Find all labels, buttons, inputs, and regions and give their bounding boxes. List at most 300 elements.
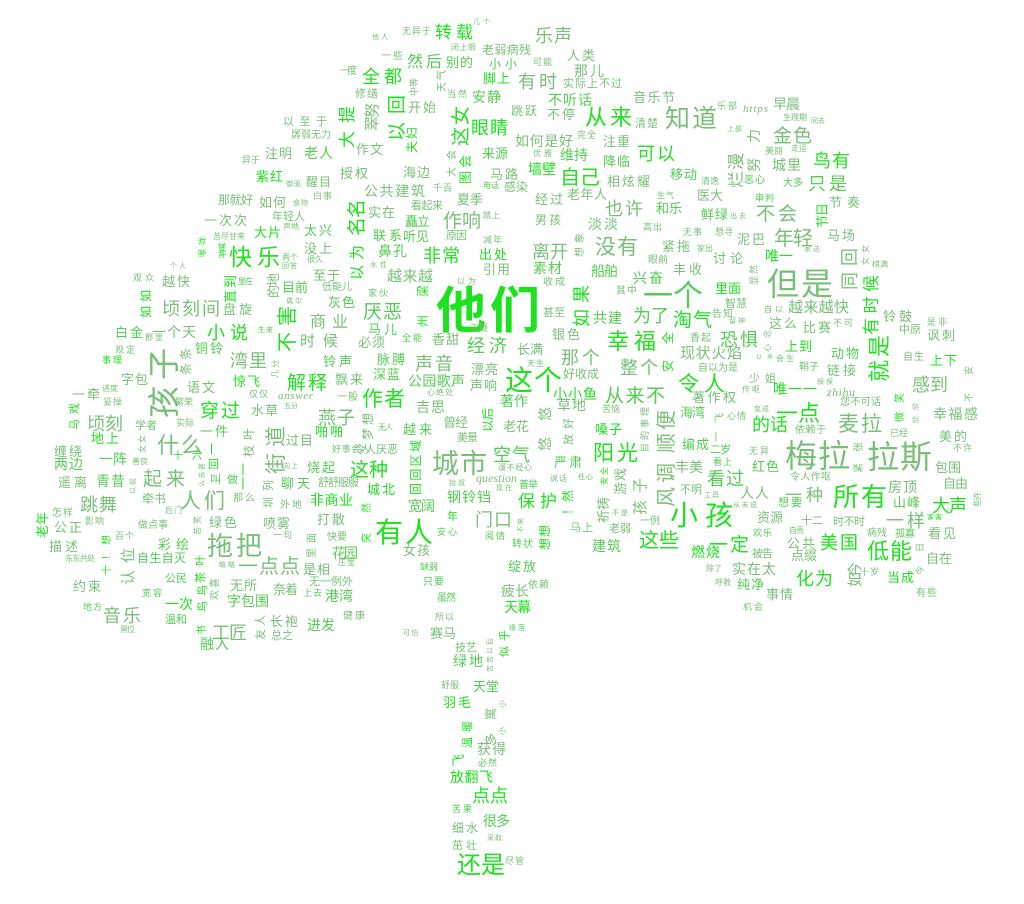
- canopy: lower left: 健康: [343, 609, 365, 622]
- canopy: centre: 收成: [543, 275, 565, 288]
- canopy: upper right: 烂漫: [727, 153, 746, 188]
- canopy: centre: 出处: [479, 247, 507, 262]
- canopy: upper right: 显然: [748, 265, 759, 285]
- canopy: centre: 天生: [527, 358, 544, 368]
- canopy: lower left: 牵书: [142, 492, 166, 506]
- canopy: centre: [354, 199, 758, 554]
- word: 令人: 令人: [678, 373, 725, 396]
- canopy: lower left: 鸟鸟: [195, 585, 209, 612]
- canopy: centre: 任心: [578, 472, 593, 481]
- canopy: centre: 如果: [572, 285, 592, 327]
- trunk words: 温暖: [461, 721, 474, 748]
- canopy: lower left: 舒舒服服: [318, 475, 359, 489]
- word: 但是: 但是: [767, 266, 833, 302]
- canopy: upper right: 上部: [727, 124, 742, 133]
- canopy: lower left: 穿过: [200, 400, 240, 422]
- canopy: lower left: 五分: [284, 401, 298, 410]
- canopy: top crown: 天气: [435, 70, 448, 92]
- canopy: top crown: 维持: [560, 147, 588, 163]
- canopy: lower right: 呼救: [715, 577, 731, 587]
- canopy: upper left: 直到: [223, 275, 238, 303]
- canopy: lower left: 外地: [280, 498, 302, 511]
- word: 人们: 人们: [180, 490, 225, 513]
- canopy: centre: 素材: [533, 260, 562, 276]
- canopy: centre: 共建: [593, 310, 622, 326]
- word: 这些: 这些: [639, 529, 679, 552]
- canopy: centre: 离开: [532, 242, 568, 262]
- canopy: upper left: 厌恶: [363, 302, 402, 323]
- canopy: centre: 梦想: [360, 413, 375, 440]
- canopy: centre: 建筑: [592, 538, 621, 554]
- canopy: centre: 顺便: [655, 410, 678, 453]
- canopy: top crown: 修缮: [355, 86, 378, 100]
- canopy: lower right: 自责: [789, 525, 804, 535]
- canopy: centre: 兴奋: [633, 270, 663, 286]
- canopy: upper left: 不害: [276, 306, 299, 352]
- canopy: lower left: 学者: [135, 418, 157, 432]
- word: 他们 (largest): 他们: [436, 283, 540, 339]
- canopy: lower right: 少姐: [749, 371, 776, 385]
- canopy: upper right: 节奏: [829, 195, 860, 210]
- trunk words: 苦苦以后: [485, 638, 494, 672]
- canopy: lower right: 紧张: [853, 442, 865, 473]
- canopy: upper left: 低能儿: [322, 280, 352, 293]
- canopy: top crown: 感染: [504, 179, 528, 194]
- canopy: centre: 悠悠: [537, 407, 553, 451]
- canopy: lower left: 遥离: [58, 475, 87, 490]
- canopy: lower left: 黑位: [120, 624, 135, 634]
- canopy: lower left: 一: [205, 443, 219, 455]
- canopy: upper left: 商业: [310, 313, 348, 331]
- canopy: lower left: 宽容: [142, 587, 162, 598]
- canopy: lower left: 圳列: [261, 480, 275, 508]
- canopy: centre: 为了: [633, 306, 669, 326]
- canopy: lower left: 百个: [115, 531, 134, 541]
- canopy: top crown: 跳跃: [511, 104, 537, 118]
- canopy: lower left: 妥操: [103, 396, 122, 407]
- canopy: lower right: 您不可话: [840, 395, 881, 408]
- canopy: centre: 声音: [415, 354, 453, 374]
- canopy: centre: 漂亮: [471, 362, 498, 377]
- canopy: lower right: 有些: [916, 586, 937, 599]
- canopy: lower right: 孤寡: [895, 527, 915, 540]
- canopy: upper left: 御驱: [286, 179, 301, 188]
- canopy: lower right: 当成: [887, 570, 914, 585]
- canopy: upper right: 医大: [697, 188, 723, 203]
- canopy: centre: 放好: [561, 418, 575, 445]
- canopy: centre: 也许: [605, 199, 643, 219]
- canopy: centre: 以为: [457, 276, 476, 286]
- canopy: centre: 城北: [367, 482, 395, 497]
- canopy: upper left: 一次次: [204, 213, 247, 228]
- canopy: upper right: 乐部: [717, 100, 737, 111]
- canopy: centre: question: [476, 471, 517, 485]
- canopy: lower left: 仅仅: [249, 388, 268, 399]
- canopy: upper left: 顷刻间: [162, 299, 220, 319]
- word: 一点: 一点: [776, 401, 820, 426]
- word: 阳光: 阳光: [593, 442, 638, 465]
- canopy: upper right: 棋满: [872, 259, 888, 269]
- canopy: lower left: 缠绕: [54, 444, 82, 459]
- canopy: top crown: 老弱病残: [482, 42, 531, 57]
- canopy: lower left: 青昔: [96, 473, 125, 489]
- canopy: top crown: 墙壁: [528, 161, 556, 177]
- canopy: top crown: 不停: [547, 107, 575, 122]
- canopy: upper left: 异于: [242, 155, 260, 165]
- canopy: top crown: 翠努: [364, 103, 381, 131]
- canopy: lower left: 融入: [200, 636, 229, 652]
- canopy: lower left: 十六: [173, 449, 202, 462]
- canopy: lower left: 实际: [176, 417, 194, 428]
- canopy: top crown: 注重: [603, 134, 630, 149]
- word: 拉斯: 拉斯: [867, 439, 932, 475]
- canopy: lower left: 条条: [179, 348, 193, 375]
- canopy: lower right: 飞: [715, 413, 726, 423]
- canopy: upper right: 中原: [899, 323, 921, 336]
- canopy: top crown: 完全: [577, 129, 596, 140]
- canopy: centre: 船舶: [591, 263, 618, 279]
- word: 有人: 有人: [375, 517, 433, 548]
- canopy: centre: 海湾: [680, 405, 705, 420]
- word: 拖把: 拖把: [207, 531, 262, 561]
- canopy: lower left: 语文: [187, 380, 215, 395]
- canopy: top crown: 实际上不过: [563, 76, 622, 90]
- canopy: upper right: 自以: [764, 304, 783, 314]
- canopy: upper left: 紫红: [256, 169, 283, 184]
- canopy: upper left: 观众: [133, 273, 154, 283]
- canopy: upper left: 老人: [304, 145, 333, 161]
- canopy: upper left: 声地: [283, 221, 299, 231]
- canopy: upper left: 呐喊: [217, 243, 227, 258]
- canopy: lower right: 不明: [680, 483, 702, 496]
- canopy: lower right: 如今: [847, 562, 864, 587]
- canopy: centre: 曾经: [443, 415, 468, 430]
- trunk words: 缘落: [509, 623, 525, 632]
- canopy: upper left: 一个天: [152, 324, 196, 340]
- canopy: top crown: 如何是好: [515, 133, 573, 149]
- canopy: upper left: 注明: [265, 146, 292, 161]
- canopy: centre: 美景: [457, 431, 478, 444]
- canopy: upper left: 至于: [313, 268, 340, 283]
- canopy: centre: 抬叔: [449, 478, 465, 487]
- canopy: centre: 长满: [517, 342, 543, 357]
- canopy: top crown: 来源: [482, 146, 508, 161]
- canopy: centre: 淡淡: [588, 216, 618, 232]
- canopy: lower right: 幸福感: [933, 406, 978, 422]
- canopy: top crown: 老年人: [567, 187, 607, 202]
- canopy: upper right: 有时候: [862, 275, 881, 335]
- canopy: lower left: 公正: [54, 520, 82, 535]
- canopy: upper left: 实在: [368, 205, 395, 220]
- canopy: centre: 年: [447, 509, 458, 523]
- canopy: upper right: 心念: [762, 330, 772, 352]
- canopy: top crown: 授权: [340, 166, 368, 181]
- canopy: lower right: 不许: [953, 442, 972, 453]
- canopy: centre: 现在: [496, 483, 512, 492]
- canopy: lower left: 跳舞: [80, 495, 117, 515]
- canopy: upper right: 不会: [756, 203, 797, 225]
- word: 一个: 一个: [643, 280, 703, 313]
- canopy: lower left: 一牵: [72, 387, 100, 402]
- canopy: top crown: 以回: [387, 95, 408, 141]
- canopy: upper right: 讽刺: [927, 328, 955, 343]
- canopy: centre: 孩子: [632, 478, 649, 515]
- canopy: upper right: 早晨: [773, 96, 800, 112]
- canopy: lower left: 进发: [307, 617, 335, 633]
- canopy: top crown: 大提: [338, 106, 357, 148]
- canopy: top crown: 生气: [657, 190, 674, 200]
- canopy: lower right: 点缀: [791, 548, 817, 563]
- canopy: upper right: 留神: [729, 316, 745, 325]
- canopy: lower left: 约束: [73, 579, 101, 594]
- canopy: upper right: 审判: [755, 192, 774, 203]
- canopy: centre: 恐惧: [720, 330, 758, 350]
- canopy: lower right: 自由: [943, 476, 968, 491]
- canopy: lower right: 燃烧: [691, 544, 720, 560]
- canopy: centre: 苦恼: [602, 403, 620, 414]
- trunk words: 细水: [452, 821, 478, 835]
- canopy: lower left: 好事会人: [332, 443, 370, 454]
- canopy: lower right: 美国: [820, 533, 858, 553]
- canopy: top crown: 音乐节: [633, 90, 675, 105]
- canopy: lower left: 里面: [306, 533, 318, 558]
- canopy: top crown: 不听话: [548, 92, 592, 108]
- canopy: centre: 从来不: [605, 385, 665, 407]
- canopy: centre: 深蓝: [373, 367, 400, 382]
- word: 自己: 自己: [560, 166, 600, 189]
- trunk words: 必然: [478, 757, 497, 768]
- canopy: upper left: 名名: [346, 199, 368, 236]
- canopy: lower left: 善良: [132, 456, 148, 466]
- canopy: lower left: 工匠: [212, 623, 247, 643]
- canopy: upper left: 那就好: [218, 193, 253, 207]
- canopy: lower left: 后门: [165, 505, 182, 515]
- canopy: centre: 香起: [690, 332, 711, 344]
- canopy: lower left: 无所: [230, 578, 257, 593]
- canopy: lower left: 一件: [200, 424, 228, 439]
- canopy: upper right: https: [743, 103, 768, 115]
- canopy: upper right: 鞘子: [799, 360, 819, 373]
- canopy: top crown: 千百: [433, 183, 452, 193]
- trunk words: 似乎: [498, 630, 511, 657]
- canopy: upper left: 水性: [370, 260, 387, 269]
- canopy: upper left: 生来: [258, 325, 273, 334]
- canopy: lower right: 机会: [743, 601, 763, 612]
- canopy: upper right: 是非: [927, 316, 947, 327]
- canopy: centre: 男孩: [535, 213, 561, 227]
- word: 年轻: 年轻: [774, 227, 813, 250]
- canopy: upper right: 越来越快: [788, 299, 849, 316]
- canopy: centre: 祈祷: [596, 497, 611, 523]
- canopy: lower left: 非商业: [310, 492, 353, 508]
- trunk words: 茁壮: [452, 839, 477, 852]
- word: 从来: 从来: [585, 105, 632, 130]
- canopy: lower left: 喷雾: [263, 516, 290, 531]
- canopy: lower right: 依赖于: [795, 423, 826, 436]
- canopy: centre: 空气: [493, 445, 530, 465]
- canopy: centre: 吉思: [416, 399, 445, 415]
- canopy: centre: 好收成: [563, 367, 599, 381]
- canopy: centre: 突然: [360, 503, 373, 543]
- trunk words: 很多: [483, 813, 510, 829]
- canopy: upper right: 家达: [804, 244, 820, 253]
- canopy: lower right: 美的: [939, 429, 967, 444]
- canopy: upper left: 个人: [170, 262, 186, 270]
- canopy: upper left: 白事: [313, 190, 332, 201]
- word: 城市: 城市: [432, 449, 487, 479]
- canopy: lower left: 顷刻: [87, 414, 123, 434]
- word: 什么: 什么: [157, 433, 203, 458]
- canopy: centre: 阅情: [485, 530, 505, 541]
- word: 小孩: 小孩: [670, 500, 733, 531]
- trunk words: [403, 543, 549, 879]
- word: 低能: 低能: [867, 539, 912, 564]
- canopy: upper left: 的地: [266, 273, 281, 298]
- canopy: lower right: 一: [712, 432, 723, 442]
- trunk words: 技艺: [455, 641, 477, 654]
- word: 解释: 解释: [287, 372, 327, 394]
- canopy: lower left: 老年: [35, 512, 50, 538]
- trunk words: 缺弱: [420, 561, 438, 572]
- canopy: lower left: 十！想: [100, 535, 113, 575]
- canopy: upper right: 里面: [715, 281, 741, 296]
- canopy: upper left: 马儿: [368, 322, 397, 337]
- canopy: upper right: 金色: [773, 125, 812, 147]
- canopy: lower right: 丰美: [675, 459, 703, 475]
- canopy: lower left: 书: [196, 625, 208, 635]
- trunk words: 赛马: [430, 626, 456, 641]
- canopy: upper right: 智慧: [725, 296, 747, 310]
- canopy: top crown: 夏季: [457, 192, 483, 207]
- canopy: centre: 声响: [470, 378, 497, 393]
- canopy: upper right: 鲜绿: [701, 207, 728, 222]
- canopy: lower left: 叫做: [210, 472, 238, 486]
- word: 鸟有: 鸟有: [813, 151, 850, 171]
- trunk words: 疲长: [501, 583, 529, 599]
- canopy: lower right: 十二: [801, 513, 823, 527]
- canopy: centre: 那个: [561, 348, 600, 368]
- canopy: centre: 高出: [643, 221, 662, 232]
- canopy: upper left: 矗立: [405, 214, 430, 229]
- canopy: top crown: 当然: [447, 88, 467, 99]
- canopy: centre: 作响: [443, 210, 481, 232]
- canopy: lower left: 起来: [143, 468, 185, 490]
- canopy: lower right: 十岁: [860, 566, 879, 577]
- canopy: centre: 州梁: [415, 285, 430, 327]
- canopy: upper left: 大片: [254, 225, 281, 240]
- canopy: lower right: 唯一一: [773, 381, 817, 397]
- canopy: centre: 令人厌恶: [354, 442, 398, 456]
- canopy: lower left: 苦笑: [192, 516, 202, 535]
- canopy: upper left: 时候: [300, 333, 338, 350]
- canopy: top crown: 人类: [567, 48, 595, 63]
- canopy: lower left: 做点事: [138, 518, 168, 531]
- canopy: upper left: 太兴: [304, 223, 332, 238]
- canopy: top crown: 大会: [445, 150, 458, 177]
- canopy: lower right: 一种: [785, 486, 823, 505]
- canopy: lower left: 上去: [303, 587, 322, 598]
- canopy: top crown: [338, 18, 717, 207]
- canopy: lower left: 音乐: [103, 606, 141, 626]
- canopy: centre: 老弱: [609, 522, 631, 535]
- canopy: upper right: 泥巴: [737, 232, 765, 247]
- canopy: lower left: 一: [236, 463, 251, 476]
- canopy: lower right: 令人作呕: [790, 470, 831, 483]
- canopy: upper left: [115, 116, 443, 352]
- trunk words: 绽放: [508, 559, 536, 574]
- canopy: upper left: 盘旋: [223, 302, 252, 317]
- canopy: centre: 安全: [660, 332, 675, 372]
- canopy: upper left: 很久: [307, 254, 323, 264]
- canopy: centre: 以后: [481, 408, 495, 432]
- canopy: lower left: 花园: [332, 545, 358, 561]
- canopy: upper right: 家出: [697, 243, 713, 253]
- canopy: upper right: 恶心: [744, 174, 765, 186]
- word: 小说: 小说: [207, 323, 248, 343]
- canopy: lower left: 奈着: [273, 582, 298, 597]
- canopy: top crown: 移动: [670, 167, 697, 182]
- canopy: centre: 减年: [483, 234, 502, 245]
- word: 幸福: 幸福: [607, 329, 656, 354]
- canopy: upper right: 就是: [867, 335, 892, 382]
- word: 孩子 (rotated): 孩子: [146, 348, 182, 418]
- canopy: lower left: 地方: [83, 601, 102, 612]
- canopy: upper left: 喉咙: [197, 237, 207, 257]
- canopy: lower left: 总之: [271, 628, 293, 642]
- canopy: upper left: 回答: [282, 261, 297, 270]
- canopy: upper right: 生理期: [783, 112, 807, 122]
- canopy: centre: 严肃: [554, 455, 582, 470]
- canopy: lower left: 啪啪: [315, 424, 343, 439]
- canopy: centre: 漫不经心: [498, 462, 532, 472]
- canopy: upper right: 城里: [772, 157, 801, 173]
- canopy: lower left: 铜铃: [195, 341, 223, 356]
- canopy: lower left: 认位: [120, 548, 137, 585]
- canopy: upper right: 比赛: [803, 320, 831, 335]
- trunk words: 尽管: [505, 855, 524, 866]
- canopy: upper left: 联系: [373, 228, 402, 243]
- canopy: centre: 整个: [620, 358, 658, 378]
- canopy: lower left: 彩绘: [158, 537, 189, 552]
- canopy: upper right: 自以为是: [698, 361, 738, 374]
- canopy: top crown: 无异于: [402, 26, 431, 36]
- word: 乐声: 乐声: [535, 26, 572, 46]
- canopy: lower right: 包围: [935, 460, 961, 475]
- word: 梅拉: 梅拉: [785, 438, 850, 474]
- canopy: lower right: 些许: [972, 492, 982, 507]
- canopy: centre: 马上: [570, 521, 593, 534]
- canopy: upper right: 清逸: [701, 175, 719, 186]
- canopy: upper right: 会生: [776, 353, 794, 363]
- canopy: centre: 紧拖: [662, 239, 690, 254]
- word: 点点: 点点: [472, 786, 508, 806]
- canopy: upper left: 如何: [259, 195, 286, 210]
- canopy: top crown: 夫妇: [405, 127, 419, 153]
- canopy: centre: 公园歌声: [408, 373, 465, 389]
- canopy: upper left: 白金: [115, 325, 143, 340]
- canopy: centre: 目的事理: [639, 407, 650, 452]
- canopy: centre: 转状: [512, 537, 533, 550]
- canopy: upper right: 出去: [730, 211, 746, 220]
- canopy: centre: 原因: [446, 229, 467, 242]
- canopy: lower right: 看见: [928, 526, 956, 541]
- canopy: upper left: 越来越: [387, 268, 433, 285]
- word: 这个: 这个: [505, 365, 562, 396]
- canopy: lower left: 快要: [327, 531, 347, 543]
- canopy: lower right: 感到: [912, 375, 948, 395]
- canopy: lower right: zhihu: [826, 385, 855, 399]
- canopy: upper left: 偶尔: [286, 296, 302, 305]
